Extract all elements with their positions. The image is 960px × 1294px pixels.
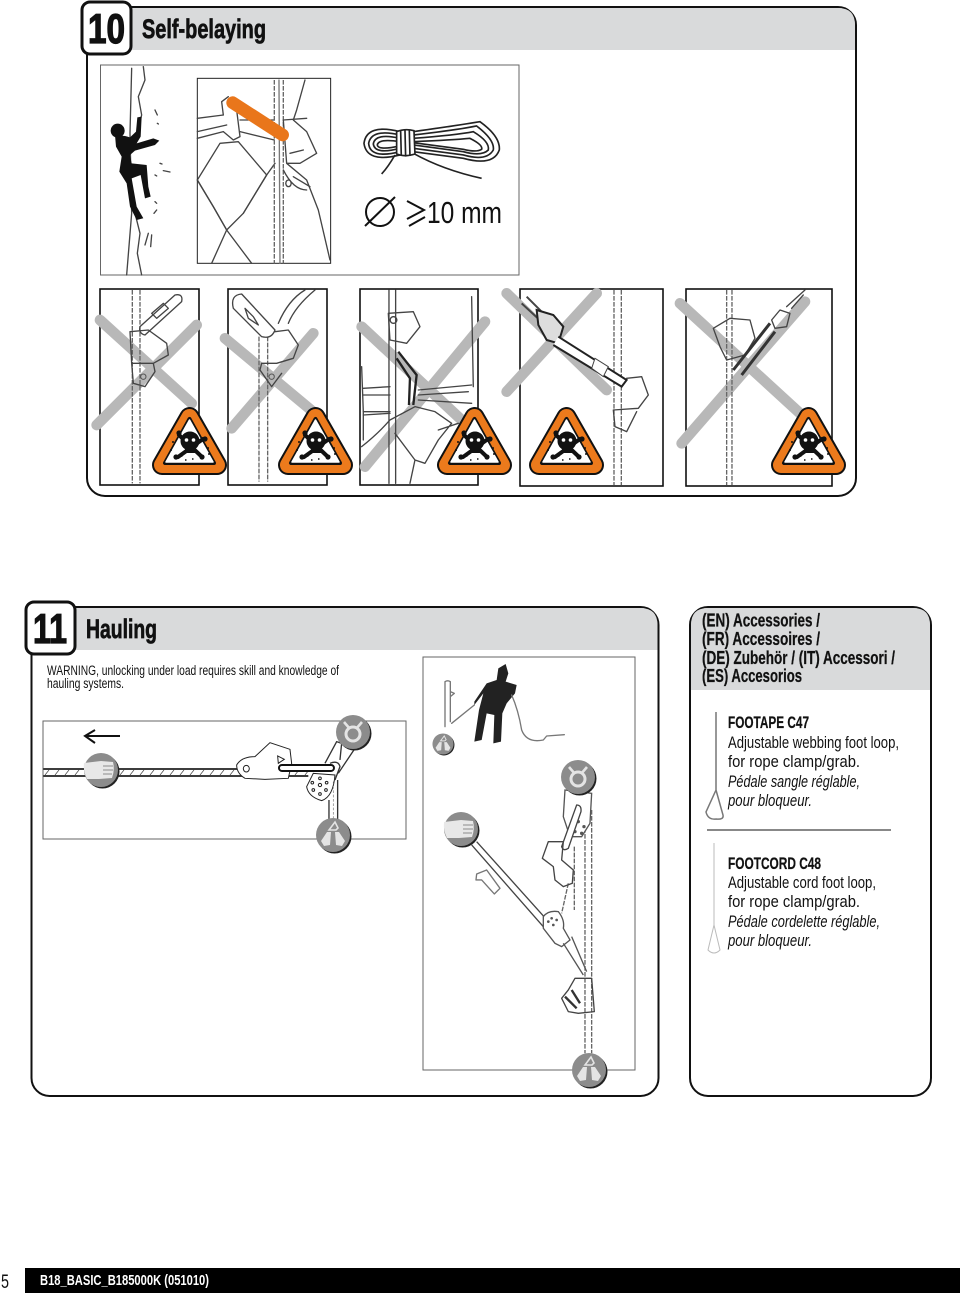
heading: accessories (702, 610, 895, 686)
footer (1, 1268, 960, 1293)
icon: diameter symbol (365, 197, 395, 226)
lower rope grab (562, 978, 594, 1013)
pulley (307, 773, 335, 801)
sling bar (279, 765, 334, 771)
icon: hand (444, 812, 480, 848)
warning text (47, 663, 339, 691)
text: footape c47: Adjustable webbing foot loop, (728, 734, 899, 752)
inner frame: harness with orange sling (197, 78, 331, 263)
icon: footcord (708, 843, 720, 953)
number badge 10: 10 (88, 5, 125, 52)
rope grab (542, 842, 573, 887)
document code: B18_BASIC_B185000K (051010) (40, 1272, 209, 1289)
panel: 11 hauling (26, 602, 658, 1096)
header band (691, 608, 930, 690)
heading: hauling: Hauling (86, 614, 157, 644)
icon: anchor point (336, 715, 372, 750)
text: footape c47 (727, 714, 899, 810)
warning triangle (781, 417, 836, 465)
icon: load (572, 1053, 608, 1088)
heading: self-belaying: Self-belaying (142, 14, 266, 44)
icon: anchor point (561, 760, 596, 796)
carabiner links (325, 742, 355, 780)
icon: climber on rock (111, 67, 170, 275)
forbidden example 2 (225, 289, 343, 485)
heading: accessories: (FR) Accessoires / (702, 629, 820, 649)
forbidden example 4 (507, 289, 663, 486)
text: footcord c48: for rope clamp/grab. (728, 893, 860, 911)
warning text: hauling systems. (47, 676, 124, 691)
text: footcord c48: Adjustable cord foot loop, (728, 874, 876, 892)
icon: footape (706, 712, 723, 819)
text: footcord c48: pour bloqueur. (727, 932, 812, 950)
illustration frame: rope and harness (100, 65, 519, 275)
icon: load (316, 818, 352, 854)
panel: accessories (690, 607, 931, 1096)
icon: hand (84, 753, 120, 788)
warning triangle (162, 417, 217, 465)
icon: small load (432, 733, 454, 755)
text: footcord c48: Pédale cordelette réglable, (728, 913, 880, 931)
heading: accessories: (ES) Accesorios (702, 666, 802, 686)
forbidden example 1 (97, 289, 217, 485)
text: footape c47: FOOTAPE C47 (728, 714, 809, 732)
warning text: WARNING, unlocking under load requires skill and knowledge of (47, 663, 339, 678)
heading: accessories: (DE) Zubehör / (IT) Accessori / (702, 648, 895, 668)
warning triangle (288, 417, 343, 465)
rope to hand (472, 842, 550, 927)
pulley lower (543, 911, 570, 947)
icon: rope coil (364, 122, 499, 178)
rope grab device (237, 743, 292, 779)
number badge 11: 11 (33, 605, 67, 652)
label: 10 mm: 10 mm (427, 195, 502, 230)
rope (43, 769, 309, 776)
text: footcord c48 (727, 855, 880, 950)
text: footape c47: pour bloqueur. (727, 792, 812, 810)
text: footape c47: Pédale sangle réglable, (728, 773, 860, 791)
figure pulling rope (445, 664, 564, 743)
diagram: horizontal hauling (43, 715, 406, 854)
pulley top (563, 790, 592, 837)
forbidden example 5 (680, 289, 836, 486)
panel: 10 self-belaying (82, 2, 856, 496)
text: footcord c48: FOOTCORD C48 (728, 855, 821, 873)
warning triangle (447, 417, 502, 465)
warning triangle (539, 417, 594, 465)
header band (75, 608, 658, 650)
forbidden example 3 (360, 289, 502, 485)
heading: accessories: (EN) Accessories / (702, 610, 820, 630)
arrow: pull direction (85, 730, 120, 743)
text: footape c47: for rope clamp/grab. (728, 753, 860, 771)
page number: 5 (1, 1272, 9, 1293)
icon: greater or equal (407, 201, 425, 226)
direction arrow (476, 870, 500, 894)
diagram: vertical hauling (423, 657, 635, 1088)
header band (131, 8, 855, 50)
